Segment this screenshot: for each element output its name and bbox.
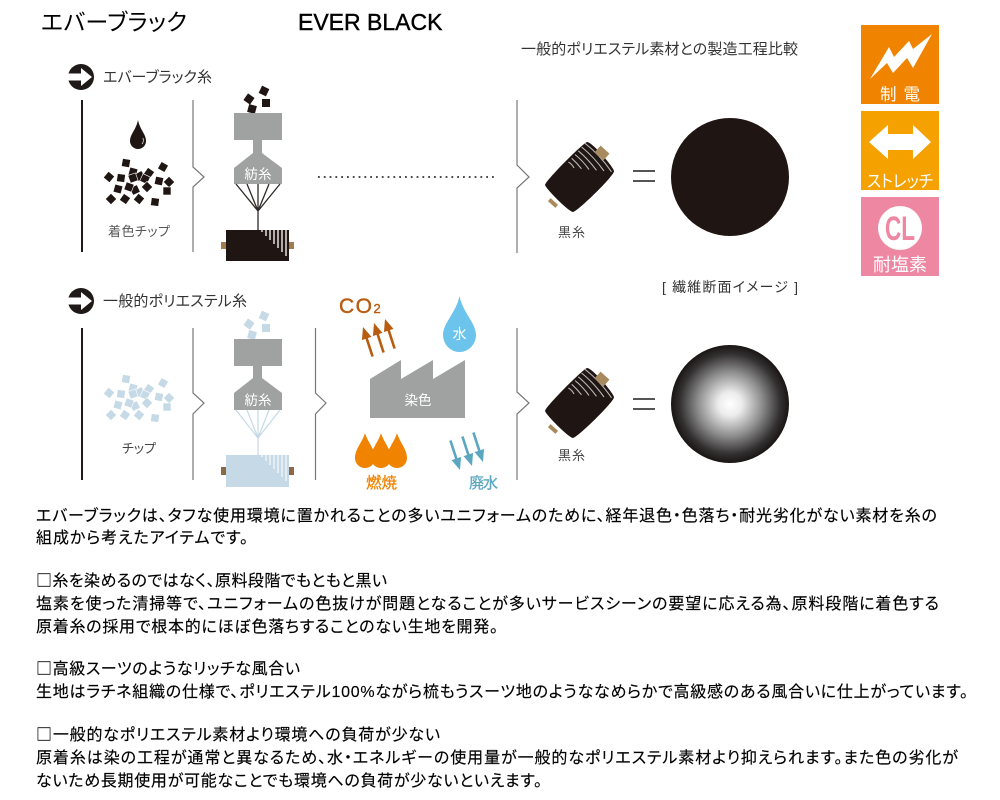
icon: fuel flames	[355, 433, 407, 468]
equals sign	[633, 399, 655, 409]
icon: wastewater arrows	[446, 431, 488, 472]
spinning machine	[234, 113, 282, 184]
feature: rich texture: □高級スーツのようなリッチな風合い	[36, 655, 300, 679]
feature: dope dyed	[36, 567, 939, 636]
pale chips	[103, 374, 175, 423]
icon: arrow circle	[66, 64, 94, 90]
fibre cross-section: dyed gradient	[671, 345, 789, 463]
icon: arrow circle	[66, 288, 94, 314]
intro paragraph	[36, 506, 937, 547]
icon: water drop	[443, 296, 476, 352]
panel: ever black yarn process	[66, 64, 789, 261]
badge: anti-static: 制 電	[880, 85, 920, 104]
divider	[517, 328, 529, 480]
chip label: チップ	[122, 441, 156, 456]
badge: anti-static	[861, 25, 939, 104]
bobbin	[221, 230, 294, 261]
icon: CO2 arrows	[358, 317, 399, 358]
yarn label: 黒糸	[558, 448, 585, 463]
text block: description	[36, 506, 968, 790]
feature: rich texture: 生地はラチネ組織の仕様で、ポリエステル100%ながら梳もうスーツ地のようななめらかで高級感のある風合いに仕上がっています。	[36, 683, 968, 701]
badge: stretch: ストレッチ	[867, 172, 933, 191]
feature: low environmental impact: ないため長期使用が可能なことでも環境への負荷が少ないといえます。	[36, 772, 542, 790]
CO2 label: CO2	[339, 295, 382, 318]
icon: dye drop	[130, 120, 146, 149]
row heading: エバーブラック糸	[103, 68, 212, 86]
yarn label: 黒糸	[558, 225, 585, 240]
feature: low environmental impact	[36, 721, 958, 790]
icon: factory	[370, 360, 465, 418]
badge: stretch	[861, 111, 939, 191]
spinning machine: 紡糸	[244, 393, 272, 408]
divider	[193, 328, 204, 480]
black chips	[103, 158, 175, 207]
spinning machine: 紡糸	[244, 167, 272, 182]
start line	[81, 100, 83, 252]
falling chips	[243, 311, 270, 340]
icon: water drop: 水	[452, 326, 466, 342]
filaments	[236, 184, 280, 230]
row heading: 一般的ポリエステル糸	[103, 293, 247, 310]
feature: dope dyed: □糸を染めるのではなく、原料段階でもともと黒い	[36, 567, 387, 591]
feature: low environmental impact: □一般的なポリエステル素材より環境への負荷が少ない	[36, 721, 440, 745]
bobbin	[221, 455, 294, 487]
falling chips	[243, 86, 270, 114]
intro paragraph: 組成から考えたアイテムです。	[36, 529, 248, 547]
title: Japanese: エバーブラック	[41, 9, 187, 35]
spinning machine	[234, 339, 282, 410]
feature: low environmental impact: 原着糸は染の工程が通常と異なるため、水・エネルギーの使用量が一般的なポリエステル素材より抑えられます。また色の劣化が	[36, 749, 958, 767]
feature: dope dyed: 塩素を使った清掃等で、ユニフォームの色抜けが問題となることが多いサービスシーンの要望に応える為、原料段階に着色する	[36, 595, 939, 613]
cross-section caption: [ 繊維断面イメージ ]	[662, 279, 798, 295]
icon: black yarn cone	[545, 142, 614, 212]
badge: chlorine resistant: 耐塩素	[873, 255, 927, 275]
feature: dope dyed: 原着糸の採用で根本的にほぼ色落ちすることのない生地を開発。	[36, 618, 498, 636]
equals sign	[633, 171, 655, 181]
divider	[316, 328, 326, 480]
feature: rich texture	[36, 655, 968, 701]
wastewater label: 廃水	[469, 475, 498, 492]
fibre cross-section: solid black	[671, 118, 789, 236]
divider	[517, 100, 529, 253]
combustion label: 燃焼	[366, 474, 397, 492]
badge: chlorine resistant: CL	[885, 210, 915, 248]
divider	[193, 100, 204, 252]
dotted connector	[318, 176, 494, 178]
title: English: EVER BLACK	[298, 9, 443, 35]
start line	[81, 328, 83, 480]
intro paragraph: エバーブラックは、タフな使用環境に置かれることの多いユニフォームのために、経年退色・色落ち・耐光劣化がない素材を糸の	[36, 506, 937, 525]
badge: chlorine resistant	[861, 197, 939, 276]
chip label: 着色チップ	[108, 224, 170, 239]
icon: black yarn cone	[545, 368, 614, 438]
comparison heading: 一般的ポリエステル素材との製造工程比較	[521, 41, 798, 58]
icon: factory: 染色	[404, 393, 432, 408]
filaments	[236, 410, 280, 455]
panel: conventional polyester yarn process	[66, 288, 789, 492]
